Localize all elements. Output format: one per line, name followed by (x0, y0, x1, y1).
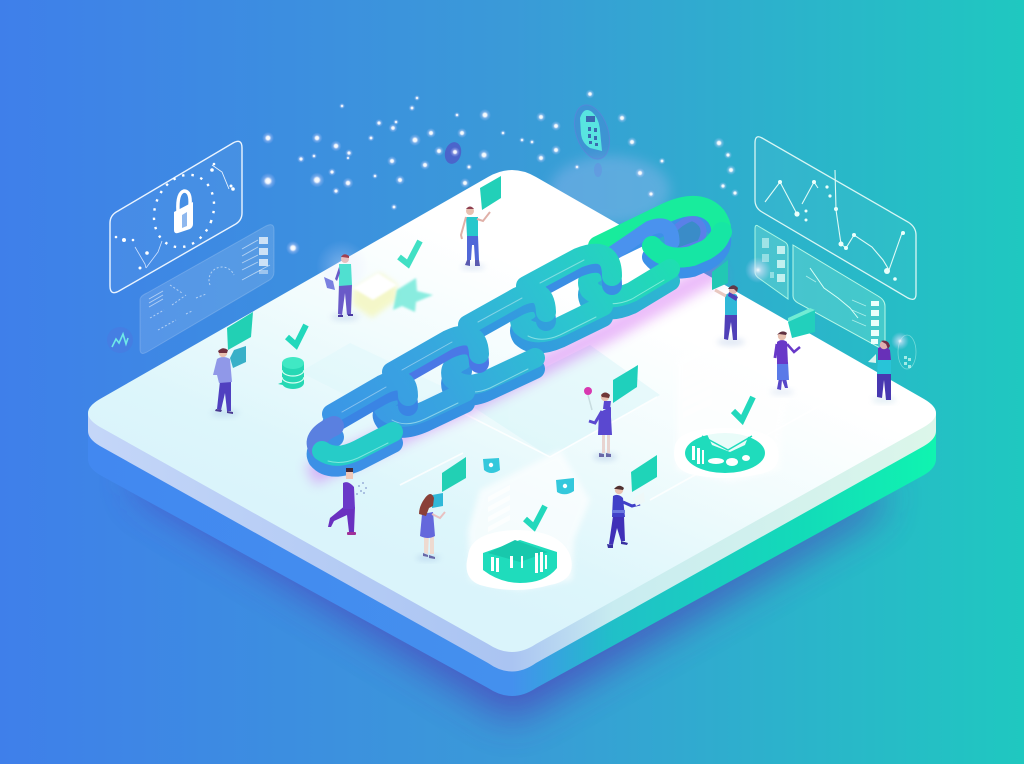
stack: right ghost bars (683, 358, 712, 418)
platform shadow (140, 450, 880, 720)
chain: inner arm (606, 226, 672, 258)
dial ticks (144, 166, 224, 256)
person: chain worker (715, 285, 745, 346)
board: right chain worker (712, 260, 728, 290)
box: right worker (788, 308, 815, 338)
person: top worker (461, 206, 490, 270)
icon: tag right (556, 478, 574, 494)
chain: link 3 upper (468, 293, 546, 334)
chain: end ring (598, 206, 722, 269)
icon: dark orb (442, 140, 464, 166)
panel: left lock hologram (110, 141, 242, 293)
white channel around lower plate (468, 450, 590, 590)
board: top worker (480, 176, 501, 210)
teal star (393, 278, 433, 312)
chain: link 3 lower (520, 306, 603, 343)
board: left worker (227, 312, 253, 368)
chain: link 4 lower (588, 269, 670, 310)
white channel around right plate (676, 340, 790, 482)
glow: right card (745, 257, 771, 283)
chain: link 4 upper (526, 254, 612, 295)
chain: link 1 lower (383, 392, 465, 428)
line chart (765, 170, 902, 270)
platform top surface (88, 170, 936, 652)
panel: left data hologram (140, 225, 274, 353)
chain shadow (310, 268, 720, 475)
check: block (399, 241, 420, 264)
person: center worker (589, 392, 617, 461)
chain: link 1 upper (332, 380, 408, 424)
star field (260, 90, 739, 255)
icon: right small badge (898, 335, 916, 369)
plate: right circuit (674, 428, 779, 478)
person: block worker (324, 254, 359, 321)
glow: far right (891, 332, 909, 350)
icon: database (278, 357, 304, 389)
platform edge band (88, 413, 936, 672)
chain (317, 206, 722, 467)
check marks (287, 241, 753, 527)
glow behind platform (550, 156, 670, 224)
check: lower plate (525, 506, 545, 527)
check: database (287, 325, 306, 345)
stack: lower ghost bars (488, 485, 510, 532)
icon: small left badge (107, 327, 133, 353)
icon: pink ball (584, 387, 592, 410)
person: far right worker (868, 341, 896, 403)
glowing block (316, 240, 433, 318)
surface tiles (300, 343, 660, 457)
platform (88, 170, 936, 696)
board: lower right worker (631, 455, 657, 492)
chain: link 2 lower (451, 358, 535, 396)
board: center worker (613, 365, 638, 403)
person: long hair worker (416, 494, 445, 561)
panel: right data card large (793, 245, 885, 348)
icon: tag left (483, 458, 500, 473)
person: running worker (328, 468, 367, 535)
panel: right data card small (755, 225, 788, 299)
chain: link 2 upper (392, 335, 479, 381)
person: left worker (211, 348, 239, 417)
icon: padlock (174, 191, 193, 233)
board: long hair worker (432, 457, 466, 508)
person: lower right worker (607, 486, 645, 548)
icon: floating lock tag (568, 100, 616, 177)
platform side wall (88, 413, 936, 696)
chain: end link (317, 426, 393, 467)
person: dress worker right (770, 331, 800, 395)
check: right plate (733, 397, 753, 420)
panel: right chart hologram (755, 137, 916, 299)
line chart (115, 163, 235, 270)
plate: lower circuit (466, 530, 572, 590)
